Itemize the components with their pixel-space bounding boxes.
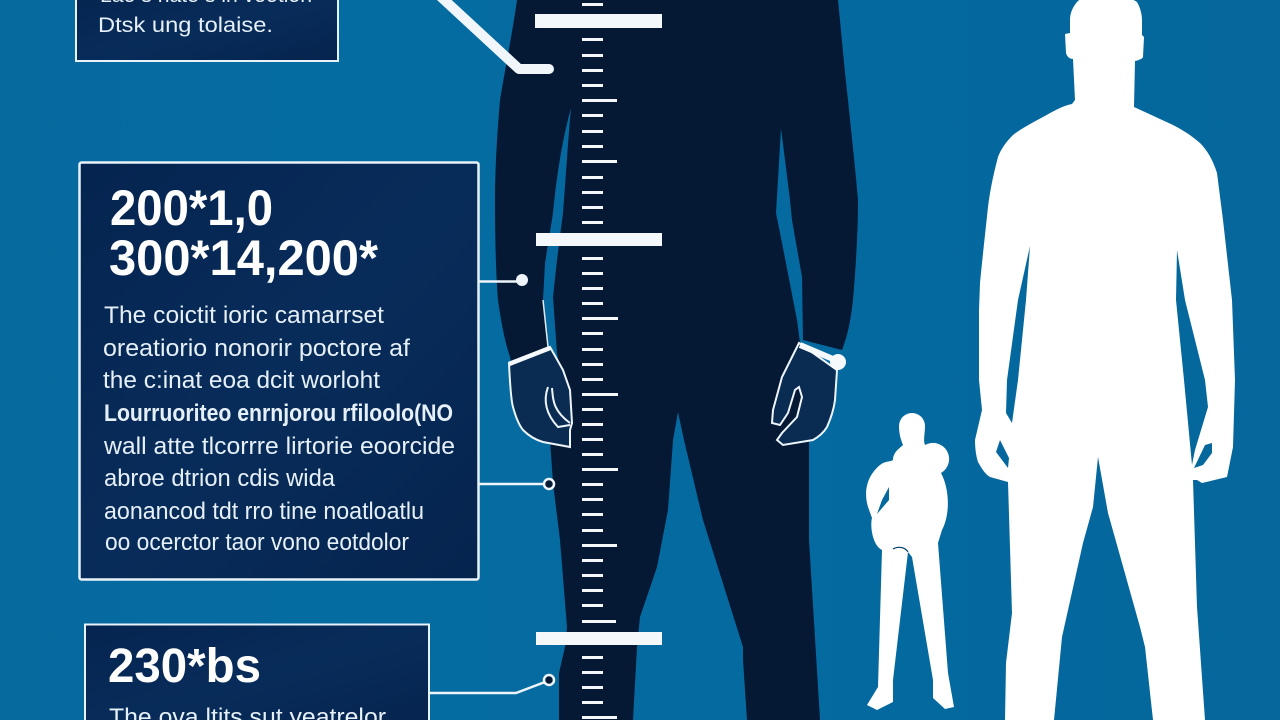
white adult silhouette [975, 0, 1235, 720]
weight number: 230*bs [108, 640, 261, 693]
heading numbers: 200*1,0 [110, 180, 273, 236]
panel: top stat box [76, 0, 338, 61]
callout: upper dot [479, 274, 528, 286]
heading numbers: 300*14,200* [109, 230, 379, 286]
heading numbers [109, 180, 379, 286]
left glove [509, 300, 572, 447]
body text: The coictit ioric camarrset [104, 302, 384, 329]
silhouette: central figure [495, 0, 858, 720]
body text: aonancod tdt rro tine noatloatlu [104, 498, 424, 525]
callout: bottom ring [429, 675, 554, 693]
panel: main stat box [80, 162, 478, 580]
body text: oo ocerctor taor vono eotdolor [105, 529, 409, 556]
crotch shadow mark [893, 547, 908, 552]
body text [103, 302, 455, 556]
measuring scale [535, 3, 662, 719]
body text: Lourruoriteo enrnjorou rfiloolo(NO [104, 400, 453, 427]
callout: middle ring [479, 479, 554, 489]
body text: wall atte tlcorrre lirtorie eoorcide [103, 433, 455, 460]
body text: abroe dtrion cdis wida [104, 465, 336, 492]
text line: Dtsk ung tolaise. [98, 14, 273, 37]
arm gap left [543, 108, 571, 423]
callout line: top box [440, 0, 549, 69]
right glove [772, 343, 846, 445]
body text: the c:inat eoa dcit worloht [103, 367, 380, 394]
body text: oreatiorio nonorir poctore af [103, 335, 410, 362]
white small figure silhouette [866, 413, 954, 710]
dark central figure with measuring scale [495, 0, 858, 720]
panel: bottom stat box [85, 624, 429, 720]
